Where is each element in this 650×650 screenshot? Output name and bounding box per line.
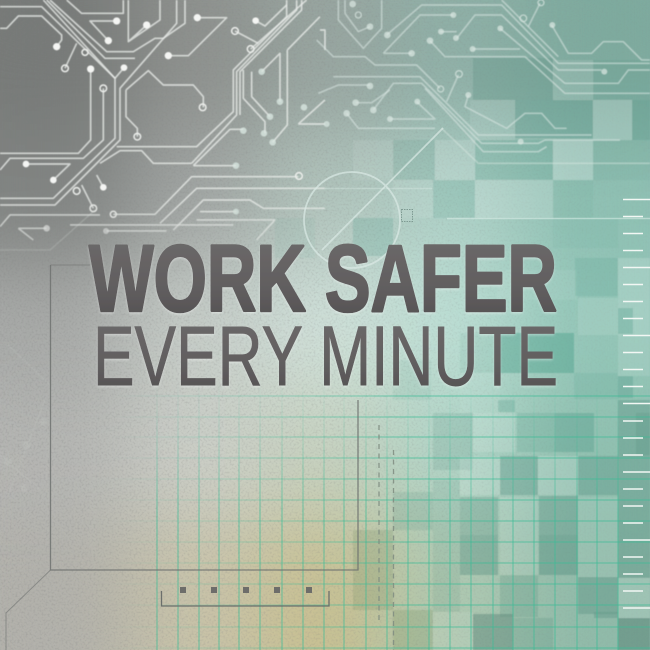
traces: right — [317, 0, 650, 163]
upper squares — [275, 58, 650, 258]
traces: left — [0, 0, 325, 240]
ruler ticks — [623, 200, 650, 608]
small square marker — [402, 210, 412, 222]
horizontal light lines — [325, 188, 650, 218]
lower squares — [353, 400, 650, 650]
nodes: left — [23, 14, 307, 234]
dashed guide lines — [379, 425, 394, 650]
target circle with diagonal — [304, 128, 443, 268]
middle squares — [393, 258, 650, 413]
green grid — [110, 380, 650, 650]
frame outline — [6, 265, 358, 650]
circuit traces — [0, 0, 650, 250]
nodes: right — [324, 0, 607, 145]
faint lower traces — [0, 210, 94, 250]
bracket with square markers — [162, 587, 329, 606]
pixel squares — [275, 58, 650, 650]
title — [89, 226, 558, 403]
